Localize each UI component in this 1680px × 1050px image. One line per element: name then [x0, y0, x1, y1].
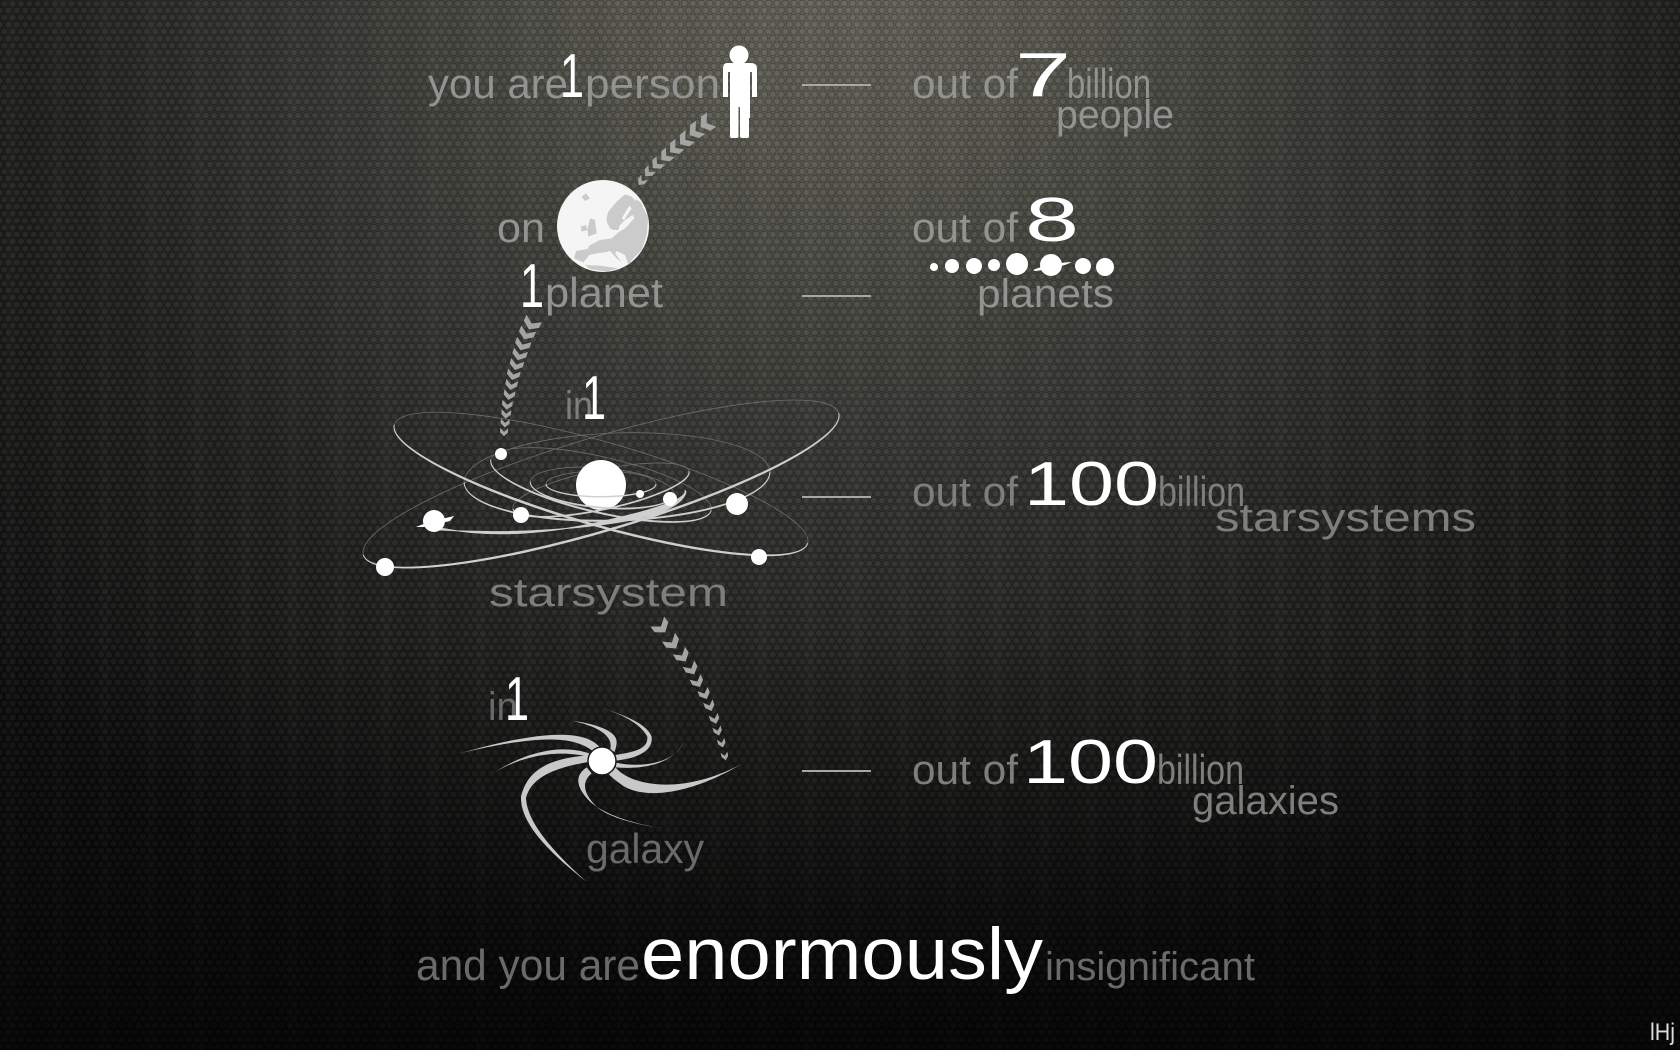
label: in 1 (galaxy) — [488, 665, 529, 734]
connector lines — [802, 85, 871, 771]
number: 100: 100 — [1024, 450, 1159, 519]
text: planet: planet — [545, 269, 663, 316]
number: 1: 1 — [560, 42, 584, 111]
arrow: starsystem to galaxy — [650, 616, 729, 761]
galactic core — [588, 747, 616, 775]
number: 1: 1 — [582, 364, 606, 433]
diagram: spiral galaxy — [460, 708, 742, 882]
orbit front halves — [363, 413, 852, 600]
text: galaxy: galaxy — [586, 825, 704, 872]
text: insignificant: insignificant — [1045, 945, 1255, 989]
text: enormously: enormously — [641, 914, 1044, 995]
text: galaxies: galaxies — [1192, 779, 1339, 823]
number: 7: 7 — [1015, 41, 1071, 110]
number: 8: 8 — [1025, 186, 1079, 255]
planets — [376, 448, 767, 576]
closing statement — [416, 914, 1255, 995]
text: billion: billion — [1158, 468, 1245, 515]
number: 1: 1 — [505, 665, 529, 734]
icon: person — [723, 46, 757, 138]
orbit back halves — [350, 368, 852, 600]
text: billion: billion — [1067, 60, 1151, 107]
text: person: person — [585, 60, 720, 107]
text: out of: out of — [912, 746, 1018, 793]
arrow: planet to starsystem — [500, 315, 542, 436]
number: 1: 1 — [520, 252, 544, 321]
text: starsystems: starsystems — [1215, 496, 1476, 540]
text: on: on — [497, 204, 545, 251]
text: and you are: and you are — [416, 941, 640, 990]
text: in: in — [565, 384, 593, 428]
text: starsystem: starsystem — [489, 571, 728, 615]
diagram: solar system — [350, 368, 852, 600]
number: 100: 100 — [1023, 728, 1158, 797]
icon: row of eight planets — [930, 253, 1114, 276]
text: out of: out of — [912, 204, 1018, 251]
star — [576, 460, 626, 510]
icon: globe showing Europe — [557, 180, 649, 272]
row: out of 7 billion people — [912, 41, 1174, 137]
text: out of: out of — [912, 60, 1018, 107]
row: out of 100 billion starsystems — [912, 450, 1476, 540]
text: out of: out of — [912, 468, 1018, 515]
signature: lHj — [1650, 1019, 1675, 1046]
text: people: people — [1056, 93, 1174, 137]
text: you are: you are — [428, 60, 568, 107]
text: planets: planets — [977, 272, 1114, 316]
row: you are 1 person — [428, 42, 720, 111]
label: in 1 (starsystem) — [565, 364, 606, 433]
row: out of 100 billion galaxies — [912, 728, 1339, 823]
text: in: in — [488, 685, 518, 729]
text: billion: billion — [1157, 746, 1244, 793]
row: out of 8 planets — [912, 186, 1114, 316]
arrow: person to planet — [635, 112, 716, 188]
row: on 1 planet — [497, 204, 663, 321]
